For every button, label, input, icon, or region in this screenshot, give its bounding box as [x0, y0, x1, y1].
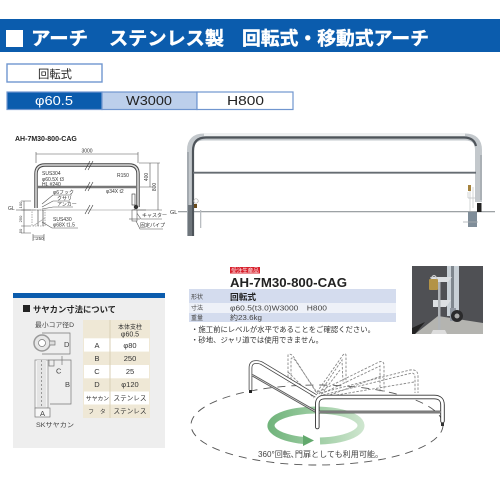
spec table: φ60.5(t3.0)W3000 H800	[230, 306, 327, 312]
notes: ・砂地、ジャリ道では使用できません。	[191, 336, 323, 344]
lock and hook	[194, 199, 201, 228]
type label box: 回転式	[38, 68, 72, 81]
fixed pipe and chain	[463, 185, 478, 227]
vertical dimensions under GL: 100	[18, 201, 23, 208]
panel heading: サヤカン寸法について	[33, 304, 116, 314]
vertical dimensions under GL: 250	[18, 215, 23, 222]
dashed rotation ellipse	[191, 385, 443, 465]
sheath diagram: A	[40, 409, 45, 418]
sheath dimension table: D	[94, 380, 100, 389]
sheath dimension table: フ タ	[88, 408, 106, 416]
foundation section	[32, 210, 45, 241]
sheath dimension table: ステンレス	[114, 394, 146, 402]
part callouts	[53, 190, 167, 229]
swung open arch	[249, 362, 316, 412]
size selector row: φ60.5	[35, 93, 73, 108]
foundation section: □250	[33, 236, 44, 241]
part callouts: SUS430	[53, 217, 72, 223]
part callouts: φ6フック	[53, 190, 74, 196]
size selector row: H800	[227, 93, 264, 108]
spec table: 重量	[191, 314, 203, 322]
sheath diagram: D	[64, 340, 70, 349]
middle rail	[193, 172, 476, 174]
sheath diagram	[34, 320, 74, 429]
height dimensions	[135, 163, 162, 210]
caster and fixed pipe	[129, 194, 140, 221]
spec table: 約23.6kg	[230, 313, 262, 322]
technical drawing	[8, 148, 167, 241]
material notes: HL #240	[42, 182, 61, 188]
sheath dimension table: φ80	[123, 341, 137, 350]
photo: padlock and caster	[412, 266, 483, 334]
product title: AH-7M30-800-CAG	[230, 276, 347, 290]
material notes: φ34X t2	[106, 189, 124, 195]
ground line	[178, 211, 495, 213]
header banner: 回転式・移動式アーチ	[242, 28, 429, 49]
part callouts: キャスター	[142, 212, 167, 219]
sheath dimension table: C	[94, 367, 100, 376]
material notes: φ60.5X t3	[42, 177, 64, 183]
material notes: R150	[117, 173, 129, 179]
width dimension: 3000	[81, 148, 93, 154]
rotation diagram	[191, 354, 444, 465]
header banner: アーチ	[31, 28, 88, 49]
material notes: SUS304	[42, 171, 61, 177]
part callouts: φ68X t1.5	[53, 222, 75, 228]
sheath diagram: 最小コア径D	[35, 320, 74, 329]
arch pipe	[190, 137, 478, 236]
break marks	[85, 161, 93, 214]
height dimensions: 400	[144, 173, 150, 181]
sheath dimension table: B	[94, 354, 100, 363]
technical drawing title: AH-7M30-800-CAG	[15, 136, 77, 143]
sheath dimension table: ステンレス	[114, 408, 146, 416]
made to order badge	[230, 266, 260, 274]
sheath dimension table: A	[94, 341, 100, 350]
sheath dimension table: φ60.5	[121, 332, 139, 338]
sheath diagram: B	[65, 380, 70, 389]
closed arch	[317, 397, 444, 427]
header banner	[0, 19, 500, 52]
size selector row: W3000	[126, 93, 172, 108]
panel: sheath dimensions	[13, 293, 165, 448]
sheath dimension table	[83, 320, 150, 418]
notes: ・施工前にレベルが水平であることをご確認ください。	[191, 325, 375, 334]
rotation caption: 360°回転､門扉としても利用可能｡	[258, 449, 379, 459]
height dimensions: 800	[152, 183, 158, 191]
width dimension	[36, 148, 138, 163]
sheath dimension table: サヤカン	[86, 396, 109, 402]
header banner: ステンレス製	[109, 28, 224, 49]
arch outline	[36, 165, 138, 208]
part callouts: クサリ	[57, 196, 72, 202]
ground line	[16, 209, 146, 211]
elevation view: arch	[170, 134, 495, 236]
material notes	[42, 171, 129, 195]
made to order badge: 受注生産品	[231, 266, 259, 274]
vertical dimensions under GL: 50	[18, 228, 23, 233]
mid rail	[37, 186, 137, 188]
sheath diagram: C	[56, 366, 62, 376]
sheath dimension table: 250	[124, 354, 136, 363]
GL label: GL	[8, 206, 15, 212]
sheath dimension table: φ120	[121, 380, 139, 389]
notes	[191, 325, 375, 344]
vertical dimensions under GL	[18, 201, 31, 233]
part callouts: 固定パイプ	[140, 223, 165, 229]
GL label: GL	[170, 210, 177, 216]
sheath dimension table: 本体支柱	[118, 323, 142, 331]
spec table	[189, 289, 396, 322]
sheath dimension table: 25	[126, 367, 134, 376]
leader lines	[42, 195, 163, 229]
caster	[477, 203, 482, 212]
green rotation arrow	[271, 410, 361, 446]
spec table: 回転式	[230, 291, 256, 302]
part callouts: アンカー	[57, 202, 77, 208]
spec table: 形状	[191, 293, 203, 301]
size selector row	[7, 92, 293, 110]
sheath diagram: SKサヤカン	[36, 421, 74, 429]
dashed ghost positions	[288, 354, 418, 398]
spec table: 寸法	[191, 304, 203, 312]
type label box	[7, 64, 102, 82]
